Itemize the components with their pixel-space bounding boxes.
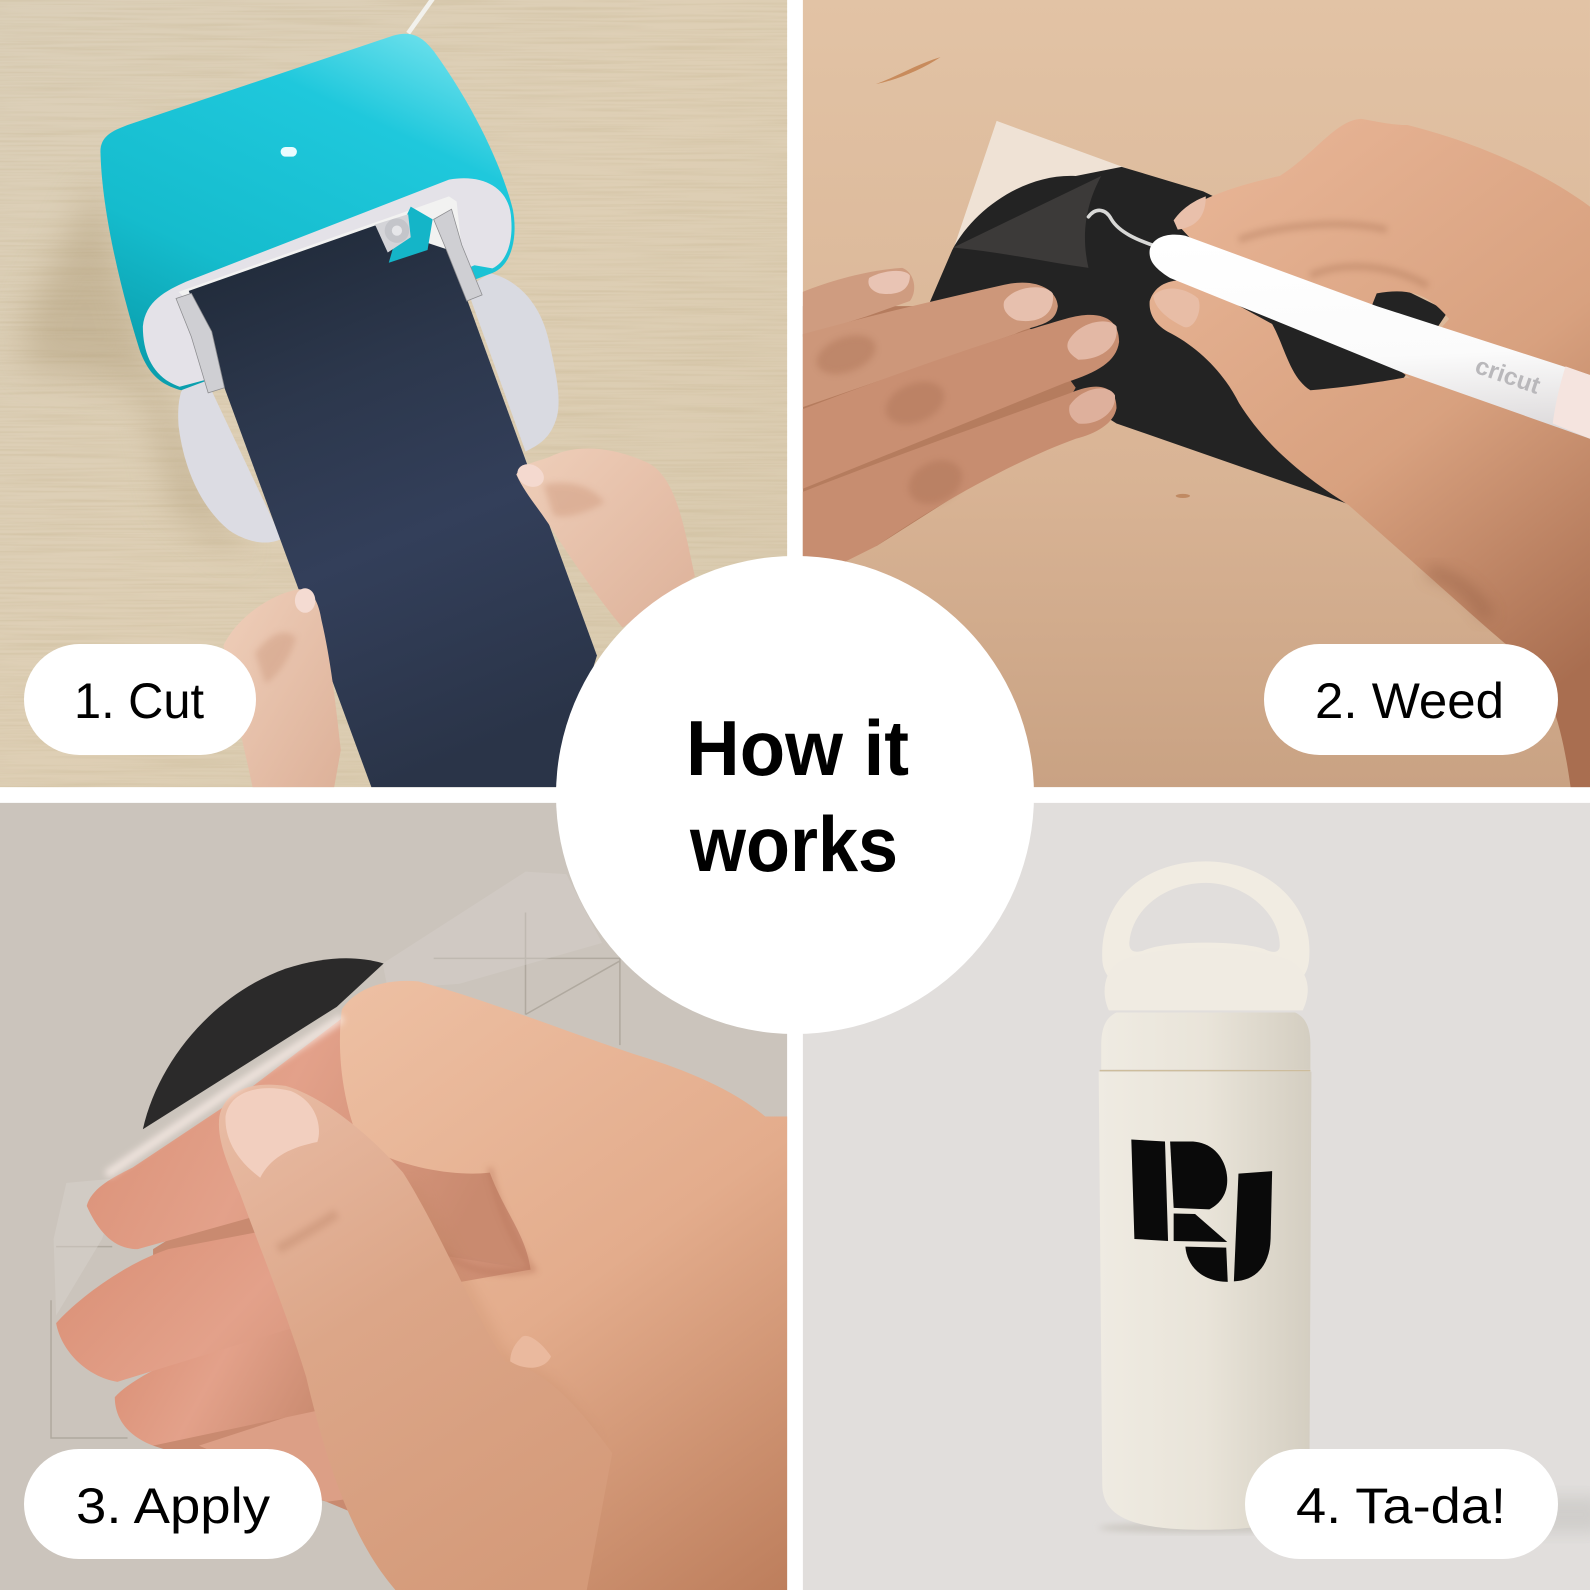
weeding hook: [1088, 210, 1155, 246]
bottle neck: [1101, 1012, 1310, 1070]
bottle body: [1099, 1072, 1311, 1530]
label: 2. Weed: 2. Weed: [1315, 673, 1504, 729]
upper paper tray: [467, 273, 559, 452]
machine teal body: [100, 34, 515, 390]
weeder pen: [1150, 235, 1590, 439]
label: 1. Cut: 1. Cut: [74, 673, 204, 729]
bottle shadow: [1099, 1523, 1313, 1533]
machine power cable: [408, 0, 434, 33]
thumb: [219, 1085, 612, 1590]
roller: [375, 214, 411, 253]
peeled vinyl flap: [953, 176, 1101, 268]
status light: [281, 147, 297, 157]
panel: step 1 cut: [0, 0, 787, 787]
left hand fingers: [803, 268, 1119, 564]
hand base under fingers: [153, 1172, 530, 1510]
finger fold shadow: [458, 1167, 536, 1277]
teal blade clamp: [389, 207, 433, 263]
wood knot mark: [876, 57, 941, 84]
left hand: [223, 588, 341, 787]
title: How it works: [686, 704, 909, 888]
label: 3. Apply: [24, 1449, 322, 1559]
thumb nail: [1153, 289, 1200, 327]
label: 2. Weed: [1264, 644, 1558, 755]
label: 3. Apply: 3. Apply: [76, 1478, 270, 1534]
thumb nail: [225, 1088, 319, 1178]
wood stain: [1176, 494, 1190, 498]
left guide: [176, 293, 224, 393]
table shadow: [1514, 1497, 1590, 1532]
upper right hand: [1174, 119, 1590, 381]
knuckle crease shadow: [278, 1213, 337, 1249]
title: How it works: works: [689, 800, 898, 888]
machine feed slot: [179, 196, 460, 296]
lower paper tray: [178, 378, 282, 543]
lower film: [56, 1246, 98, 1248]
bottle lid: [1105, 948, 1308, 1010]
RJ logo: [1131, 1139, 1272, 1282]
panel: step 3 apply: [0, 803, 787, 1590]
transfer tape grid: [51, 912, 620, 1438]
bottle seam: [1100, 1069, 1310, 1072]
center circle: [556, 556, 1034, 1034]
finger shading: [1239, 224, 1428, 286]
label: 4. Ta-da!: [1245, 1449, 1558, 1559]
bottle handle: [1102, 861, 1309, 984]
right hand: [514, 448, 695, 628]
index nail: [1174, 196, 1206, 230]
weeder pen: cricut: [1472, 353, 1544, 400]
navy vinyl sheet: [189, 226, 597, 787]
title: How it works: How it: [686, 704, 909, 792]
film highlight: [110, 1020, 339, 1173]
black vinyl half circle: [143, 958, 384, 1129]
thumb web crease: [510, 1336, 551, 1368]
panel: step 4 ta-da: [803, 803, 1590, 1590]
panel: step 2 weed: [803, 0, 1590, 787]
hand fingers: [56, 1019, 415, 1502]
machine interior: [143, 178, 512, 387]
thumb side shadow: [408, 1183, 592, 1443]
transfer liner: [952, 121, 1127, 253]
palm crease: [1428, 571, 1489, 617]
thumb and palm: [1150, 280, 1590, 787]
black vinyl: [929, 167, 1448, 505]
machine shadow: [16, 194, 233, 542]
transfer film: [434, 912, 550, 965]
label: 4. Ta-da!: 4. Ta-da!: [1296, 1478, 1506, 1534]
back of hand: [340, 981, 787, 1590]
right guide: [434, 209, 482, 301]
label: 1. Cut: [24, 644, 256, 755]
